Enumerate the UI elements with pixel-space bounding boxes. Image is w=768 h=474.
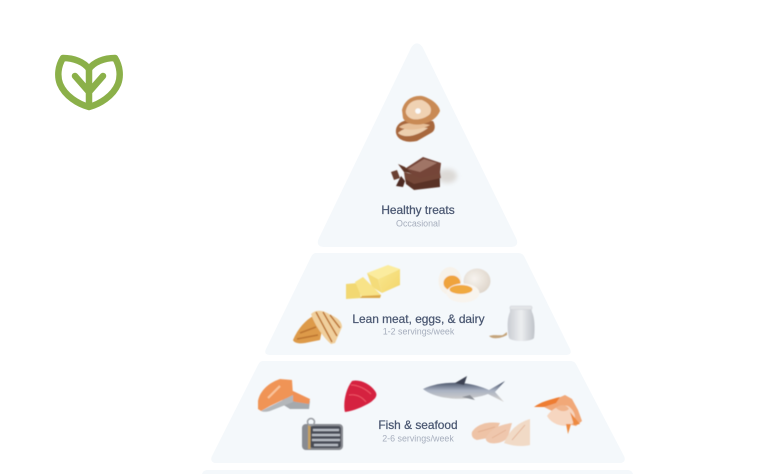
panel: next tier, cropped at the page bottom [202, 470, 633, 474]
heading: healthy treats: Healthy treats [381, 203, 455, 217]
icon: salmon steaks [258, 379, 310, 412]
label: 2-6 servings/week: 2-6 servings/week [382, 434, 454, 444]
icon: boiled eggs [438, 267, 490, 302]
heading: fish and seafood: Fish & seafood [378, 418, 458, 432]
icon: tin of sardines [302, 418, 343, 450]
icon: whole fish [423, 376, 505, 402]
logo: green leaf heart [58, 58, 120, 107]
icon: white fish fillets [472, 419, 530, 446]
icon: tuna steak [344, 381, 376, 412]
heading: lean meat, eggs and dairy: Lean meat, eggs, & dairy [352, 312, 485, 326]
panel: lean meat, eggs and dairy tier [265, 253, 571, 355]
icon: yogurt jar and spoon [489, 306, 535, 341]
panel: fish and seafood tier [211, 361, 625, 463]
icon: dried apple chips [396, 96, 440, 142]
icon: chocolate pieces [391, 157, 457, 190]
icon: butter [346, 265, 400, 299]
panel: healthy treats tier [318, 43, 517, 247]
label: occasional: Occasional [396, 218, 440, 228]
label: 1-2 servings/week: 1-2 servings/week [383, 326, 455, 336]
icon: grilled chicken [293, 311, 342, 344]
icon: shrimp [534, 395, 582, 434]
